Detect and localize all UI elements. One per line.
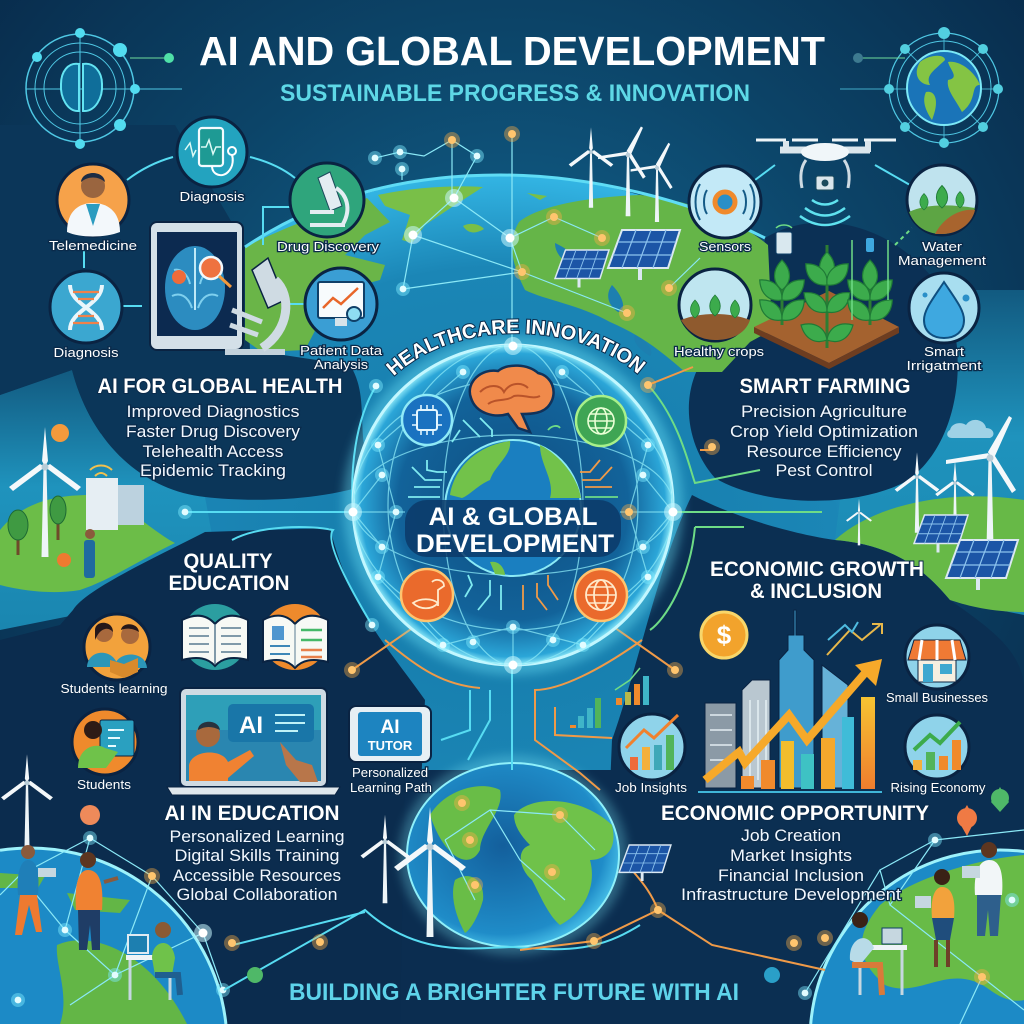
label xyxy=(350,765,432,795)
icon: laptop with teacher xyxy=(167,688,340,795)
heading: EDUCATION xyxy=(168,572,290,595)
list xyxy=(730,402,918,480)
center text band xyxy=(405,500,621,557)
center label xyxy=(416,503,614,558)
label: Sensors xyxy=(699,239,752,254)
icon: drone xyxy=(756,140,896,225)
icon: world xyxy=(575,569,627,621)
heading: QUALITY xyxy=(184,550,272,573)
section: global health xyxy=(49,117,383,480)
icon: microscope xyxy=(290,163,364,237)
people: bottom left xyxy=(15,845,180,1000)
icon: tablet with lungs xyxy=(150,222,243,350)
label: Water xyxy=(922,239,963,254)
icon: left wind turbine xyxy=(9,427,81,557)
left-bottom wind turbine xyxy=(1,754,53,848)
icon: top-left brain emblem xyxy=(26,28,182,149)
icon: students xyxy=(72,709,138,775)
icon: rising economy xyxy=(905,715,969,779)
bottom globe xyxy=(399,755,627,955)
icon: right wind turbines xyxy=(846,416,1016,548)
list: Faster Drug Discovery xyxy=(126,422,300,441)
circuit traces xyxy=(408,418,618,610)
right sky scene xyxy=(835,290,1024,615)
icon: chip xyxy=(402,395,452,445)
wind turbines at top xyxy=(569,126,673,222)
icon: orange pin and wifi xyxy=(51,424,112,476)
icon: top-right earth emblem xyxy=(840,27,1003,148)
icon: telemedicine doctor xyxy=(57,164,129,236)
icon: coin xyxy=(701,612,747,658)
heading xyxy=(168,550,290,595)
label: Drug Discovery xyxy=(277,239,380,254)
icon: globe network xyxy=(576,396,626,446)
list xyxy=(170,827,344,904)
icon: sensors xyxy=(689,166,761,238)
label: Students learning xyxy=(60,681,168,696)
label xyxy=(300,343,383,372)
title: AI AND GLOBAL DEVELOPMENT xyxy=(199,28,825,74)
list: Improved Diagnostics xyxy=(126,402,300,421)
icon: AI tutor card xyxy=(349,706,431,762)
panel: education dark backdrop xyxy=(0,528,425,1024)
label: Diagnosis xyxy=(180,189,245,204)
large background globe ocean xyxy=(90,175,910,845)
label: Telemedicine xyxy=(49,238,137,253)
label xyxy=(906,344,982,373)
icon: job insights xyxy=(619,714,685,780)
label: Job Insights xyxy=(615,780,688,795)
solar panels on globe xyxy=(555,230,680,288)
left sky scene xyxy=(0,370,212,630)
label: Learning Path xyxy=(350,780,432,795)
icon: cloud xyxy=(947,420,993,438)
central AI globe xyxy=(343,335,683,675)
icon: patient data chart xyxy=(305,268,377,340)
icon: dna xyxy=(50,271,122,343)
heading: AI IN EDUCATION xyxy=(164,802,340,825)
inner earth xyxy=(445,440,581,576)
list: Pest Control xyxy=(776,461,872,480)
heading: ECONOMIC GROWTH xyxy=(710,558,924,581)
heading: & INCLUSION xyxy=(750,580,882,603)
panel: health dark backdrop xyxy=(0,125,376,500)
list: Telehealth Access xyxy=(142,442,284,461)
label: Personalized xyxy=(352,765,428,780)
icon: skyline and growth chart xyxy=(698,610,882,792)
icon: learning xyxy=(401,569,453,621)
label: Patient Data xyxy=(300,343,383,358)
location pins xyxy=(80,787,1009,983)
section: education xyxy=(60,550,432,904)
list: Epidemic Tracking xyxy=(140,461,286,480)
list: Personalized Learning xyxy=(170,827,344,846)
label: Smart xyxy=(924,344,964,359)
list: Job Creation xyxy=(741,826,841,845)
icon: irrigation drop xyxy=(909,273,979,343)
label: Analysis xyxy=(314,357,369,372)
bottom-right corner globe xyxy=(798,830,1024,1024)
heading xyxy=(710,558,924,603)
icon: large microscope xyxy=(225,258,286,352)
icon: water management xyxy=(907,165,977,235)
icon: phone stethoscope xyxy=(177,117,247,187)
list: Digital Skills Training xyxy=(174,846,340,865)
heading: AI FOR GLOBAL HEALTH xyxy=(98,375,342,398)
icon: healthy crops xyxy=(679,269,751,341)
bottom-left corner globe xyxy=(0,831,230,1024)
list: Precision Agriculture xyxy=(741,402,907,421)
list: Infrastructure Development xyxy=(681,885,901,904)
icon: small bar charts xyxy=(570,668,649,728)
icon: right solar panels xyxy=(914,515,1018,590)
icon: AI tutor card: AI xyxy=(380,717,400,738)
icon: field sensors xyxy=(776,225,888,320)
panel: farming dark backdrop xyxy=(689,222,958,501)
icon: store xyxy=(905,625,969,689)
curved heading: healthcare innovation: HEALTHCARE INNOVATION xyxy=(384,318,648,377)
icon: crop plants on soil xyxy=(754,245,899,369)
center label: AI & GLOBAL xyxy=(428,503,598,531)
label: Diagnosis xyxy=(54,345,119,360)
list: Accessible Resources xyxy=(173,866,341,885)
section: smart farming xyxy=(674,165,986,480)
list: Market Insights xyxy=(730,846,852,865)
icon: open book xyxy=(182,604,248,670)
right hill scene xyxy=(835,416,1024,612)
list: Crop Yield Optimization xyxy=(730,422,918,441)
label: Healthy crops xyxy=(674,344,765,359)
panel: economic dark backdrop xyxy=(600,495,1024,1024)
globe continents xyxy=(245,186,772,372)
icon: brain xyxy=(470,366,554,432)
footer tagline: BUILDING A BRIGHTER FUTURE WITH AI xyxy=(289,979,739,1006)
list xyxy=(126,402,300,480)
label: Small Businesses xyxy=(886,690,988,705)
icon: second book xyxy=(262,604,328,670)
label xyxy=(898,239,986,268)
icon: AI tutor card: TUTOR xyxy=(368,738,413,753)
label: Management xyxy=(898,253,986,268)
people: bottom right xyxy=(850,842,1002,995)
globe edge glow xyxy=(245,175,765,247)
icon: laptop with teacher: AI xyxy=(239,712,263,739)
icon: students learning xyxy=(84,614,150,680)
icon: coin: $ xyxy=(717,620,732,650)
heading: ECONOMIC OPPORTUNITY xyxy=(661,802,929,825)
list: Resource Efficiency xyxy=(746,442,902,461)
left hill scene xyxy=(0,424,175,592)
globe top network xyxy=(368,126,700,346)
heading: SMART FARMING xyxy=(740,375,910,398)
network connection lines xyxy=(84,157,912,990)
section: economy xyxy=(570,558,988,904)
label: Irrigatment xyxy=(906,358,982,373)
list: Financial Inclusion xyxy=(718,866,864,885)
bottom globe wind turbines and solar xyxy=(361,807,671,937)
list: Global Collaboration xyxy=(176,885,338,904)
label: Students xyxy=(77,777,132,792)
subtitle: SUSTAINABLE PROGRESS & INNOVATION xyxy=(280,80,750,107)
label: Rising Economy xyxy=(890,780,986,795)
icon: left buildings, trees and person xyxy=(8,478,144,578)
list xyxy=(681,826,901,904)
center label: DEVELOPMENT xyxy=(416,530,614,558)
panel: bottom centre dark backdrop xyxy=(400,770,620,1024)
